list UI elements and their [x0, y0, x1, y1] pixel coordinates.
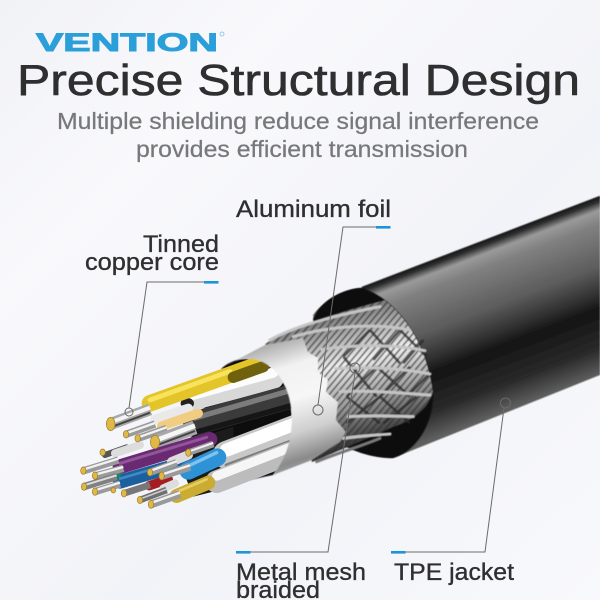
conductor tips [81, 417, 191, 508]
subtitle: provides efficient transmission [136, 136, 468, 162]
conductors lower [84, 443, 213, 504]
cable jacket [313, 197, 600, 458]
wire: mustard [163, 479, 208, 496]
cable illustration [81, 197, 600, 508]
conductor: large front [155, 426, 195, 446]
label: tinned copper core [85, 231, 219, 276]
wire: lower white [217, 448, 290, 482]
wire: red [149, 479, 168, 486]
subtitle: Multiple shielding reduce signal interference [57, 108, 539, 134]
leader: tinned copper core [125, 281, 218, 416]
foil inner dark opening [190, 359, 292, 485]
leader: aluminum foil [313, 226, 390, 415]
label: aluminum foil: Aluminum foil [236, 196, 391, 223]
wire: dark blue [110, 461, 183, 482]
wire: filler shadow [173, 427, 233, 497]
wire: pale white and orange inners [155, 408, 198, 426]
conductors upper [111, 408, 167, 438]
leader: TPE jacket [391, 398, 510, 554]
wire: white middle [227, 423, 297, 465]
label: metal mesh braided [236, 559, 366, 600]
label: metal mesh braided: Metal mesh [236, 559, 366, 586]
label: TPE jacket: TPE jacket [394, 559, 514, 586]
wire: light blue [172, 453, 217, 471]
wire: yellow [150, 364, 263, 403]
title: Precise Structural Design [17, 56, 580, 105]
jacket inner end [313, 288, 433, 458]
metal mesh braid [265, 300, 433, 462]
wire: rear white [181, 373, 273, 409]
leader: metal mesh braided [236, 363, 360, 554]
inner wires [81, 364, 297, 508]
logo: VENTION: VENTION [36, 29, 218, 57]
logo: VENTION [36, 29, 224, 57]
label: tinned copper core: Tinned [143, 231, 219, 258]
wire: purple [105, 437, 210, 467]
wire: black [195, 391, 290, 432]
aluminum foil [227, 338, 346, 475]
subtitle [57, 108, 539, 162]
label: tinned copper core: copper core [85, 249, 219, 276]
